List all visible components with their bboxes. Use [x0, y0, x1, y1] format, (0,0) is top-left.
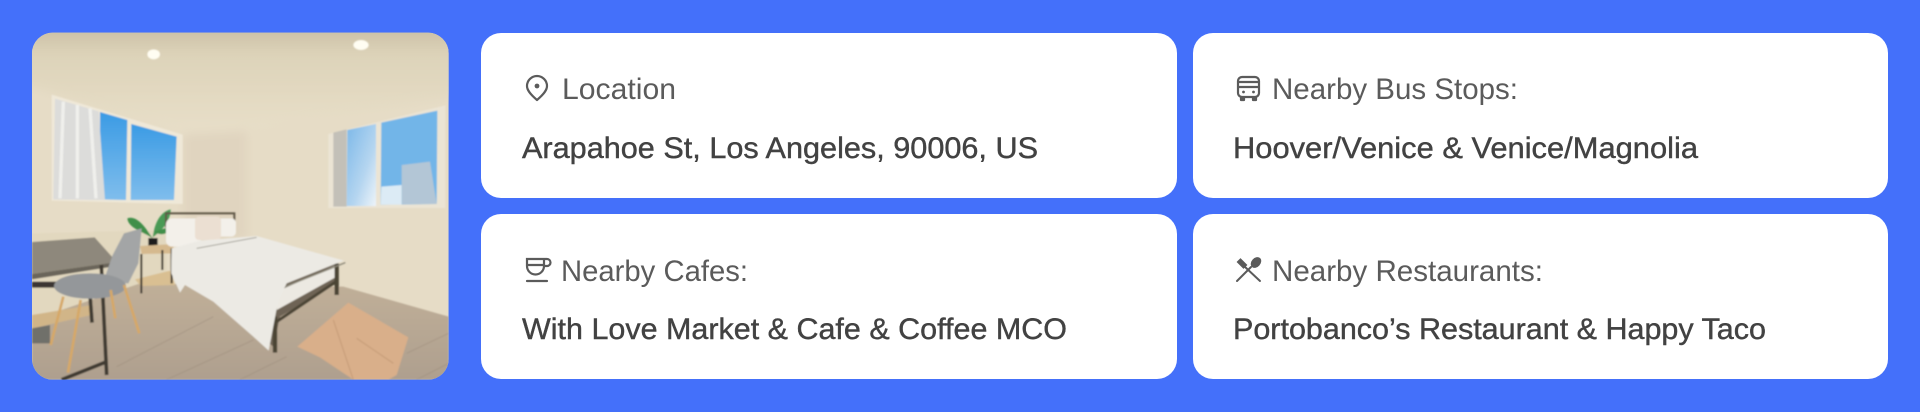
chair [51, 228, 142, 373]
desk [32, 237, 117, 380]
label: restaurants: Nearby Restaurants: [1272, 255, 1543, 288]
bed frame [275, 263, 345, 353]
ceiling lights [147, 40, 369, 59]
panel: cafes [481, 214, 1177, 379]
bed headboard [166, 213, 234, 227]
lower left wall [32, 230, 166, 301]
floor planks [211, 318, 212, 319]
mattress side [277, 265, 337, 310]
rug [297, 303, 408, 380]
icon: bus [1238, 77, 1259, 100]
panel: location [481, 33, 1177, 198]
value: cafes: With Love Market & Cafe & Coffee MCO [522, 313, 1067, 346]
floor [32, 283, 449, 380]
icon: fork and spoon [1237, 256, 1262, 281]
room photo [20, 20, 460, 380]
value: location: Arapahoe St, Los Angeles, 90006, US [522, 132, 1038, 165]
under-bed shadow [270, 264, 336, 346]
side table [135, 244, 175, 293]
pillows [166, 217, 236, 247]
icon: map pin [527, 76, 547, 100]
label: cafes: Nearby Cafes: [561, 255, 748, 288]
value: restaurants: Portobanco’s Restaurant & Happy Taco [1233, 313, 1766, 346]
value: bus stops: Hoover/Venice & Venice/Magnolia [1233, 132, 1699, 165]
ceiling [20, 20, 460, 134]
label: bus stops: Nearby Bus Stops: [1272, 73, 1518, 106]
panel: bus stops [1193, 33, 1888, 198]
back wall shade [183, 131, 247, 240]
panel: restaurants [1193, 214, 1888, 379]
right window [328, 105, 445, 208]
icon: coffee cup [527, 259, 550, 281]
bed duvet [171, 236, 344, 351]
plant [127, 209, 171, 247]
label: location: Location [562, 73, 676, 106]
left window [52, 95, 183, 204]
